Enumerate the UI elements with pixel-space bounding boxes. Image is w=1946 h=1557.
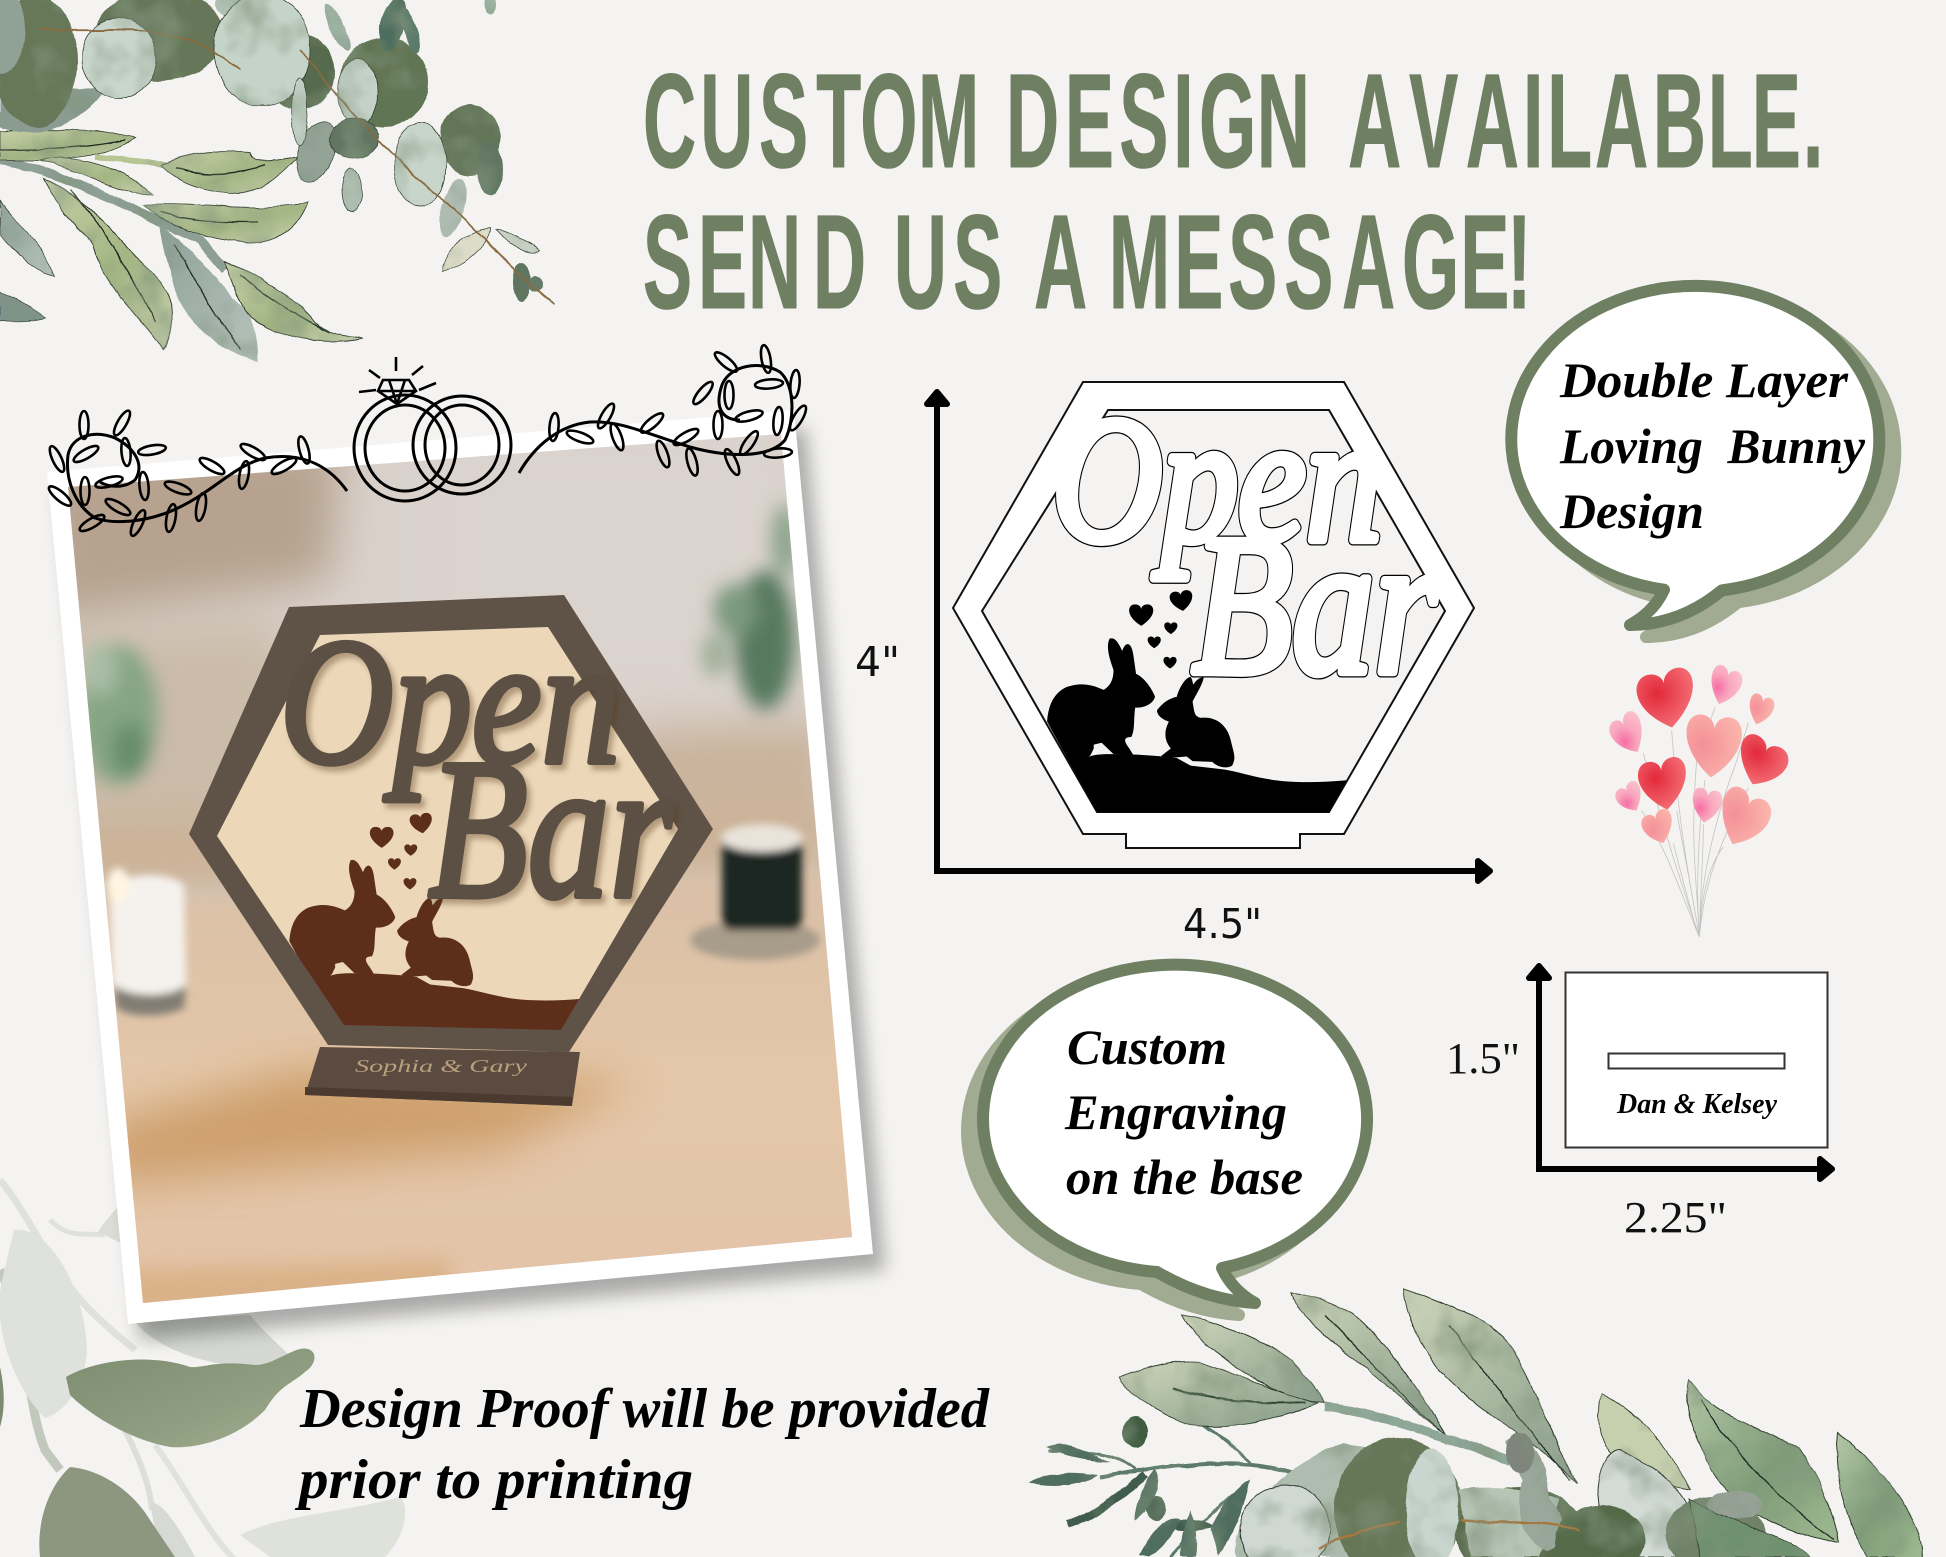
photo scene [68,434,852,1303]
bubble text: Engraving [1064,1084,1287,1140]
label: width: 4.5" [1183,900,1262,948]
slot [1608,1054,1784,1068]
lettering: Open Bar: Open [280,602,620,801]
bubble text: Double Layer [1559,352,1849,408]
hexagon frame [953,382,1474,848]
foliage: bottom-left pale leaves [0,1180,405,1557]
label: base width: 2.25" [1624,1193,1727,1242]
horizontal arrow [1536,1159,1832,1179]
bubble text [1559,352,1866,539]
wood panel [210,627,690,1030]
balloon strings [1642,707,1748,937]
sprig [1028,1417,1293,1557]
dimension diagram: base [1446,966,1832,1242]
ornament: vines and wedding rings over the card [46,344,809,538]
engraved bunnies [289,812,583,1030]
plant left [78,644,158,785]
illustration: heart balloons [1606,662,1792,937]
caption: design proof note: prior to printing [295,1449,693,1511]
card shadow [59,428,885,1340]
lettering: Open Bar: Bar [428,719,674,940]
caption: design proof note: Design Proof will be provided [299,1378,990,1440]
right vine [519,344,809,477]
bubble text: Loving Bunny [1559,418,1866,474]
bunny silhouette [1047,589,1347,812]
horizontal arrow [934,861,1490,881]
lettering outline layer: Bar [1192,495,1439,716]
leaf: lower sage [39,1467,175,1557]
plant right [701,504,799,710]
engraving text: Dan & Kelsey [1616,1089,1778,1120]
stand base [305,1047,580,1106]
speech bubble: double layer [1511,286,1895,637]
vertical arrow [1529,966,1549,1169]
lettering: Open Bar: Bar [1192,495,1439,716]
engraved names: Sophia & Gary [355,1056,527,1076]
photo card with product picture [40,410,900,1340]
lettering outline layer: Open [1052,380,1382,579]
heading: CUSTOM DESIGN AVAILABLE. [643,46,1823,196]
lettering: Open Bar [1052,380,1439,716]
olive leaves [1120,1288,1923,1557]
vertical arrow [927,392,947,871]
product: wooden hexagon sign [189,595,713,1106]
lettering: Open Bar [280,602,674,940]
eucalyptus leaves [0,0,554,304]
eucalyptus leaves [1236,1432,1810,1557]
hexagon frame [189,595,713,1052]
caption: design proof note [295,1378,990,1511]
left vine [46,409,347,538]
bubble text: Design [1559,483,1704,539]
label: height: 4" [855,638,900,686]
lettering: Open Bar: Open [1052,380,1382,579]
base plate [1566,972,1828,1148]
bubble text [1064,1019,1303,1205]
cup and plate [690,824,820,960]
heading [643,46,1823,337]
foliage: bottom-right watercolor cluster [1028,1288,1923,1557]
label: base height: 1.5" [1446,1034,1520,1083]
dimension diagram: hexagon sign [855,380,1490,948]
bubble text: on the base [1066,1149,1303,1205]
speech bubble: custom engraving [967,965,1367,1315]
icon: wedding rings with diamond [354,357,511,501]
candle [107,868,186,1016]
lettering outline layer [1052,380,1439,716]
bubble text: Custom [1067,1019,1227,1075]
heading: SEND US A MESSAGE! [643,187,1532,337]
stems and olive leaves [0,85,362,362]
card frame [47,410,873,1324]
leaf: large sage [66,1348,314,1447]
foliage: top-left watercolor cluster [0,0,554,362]
